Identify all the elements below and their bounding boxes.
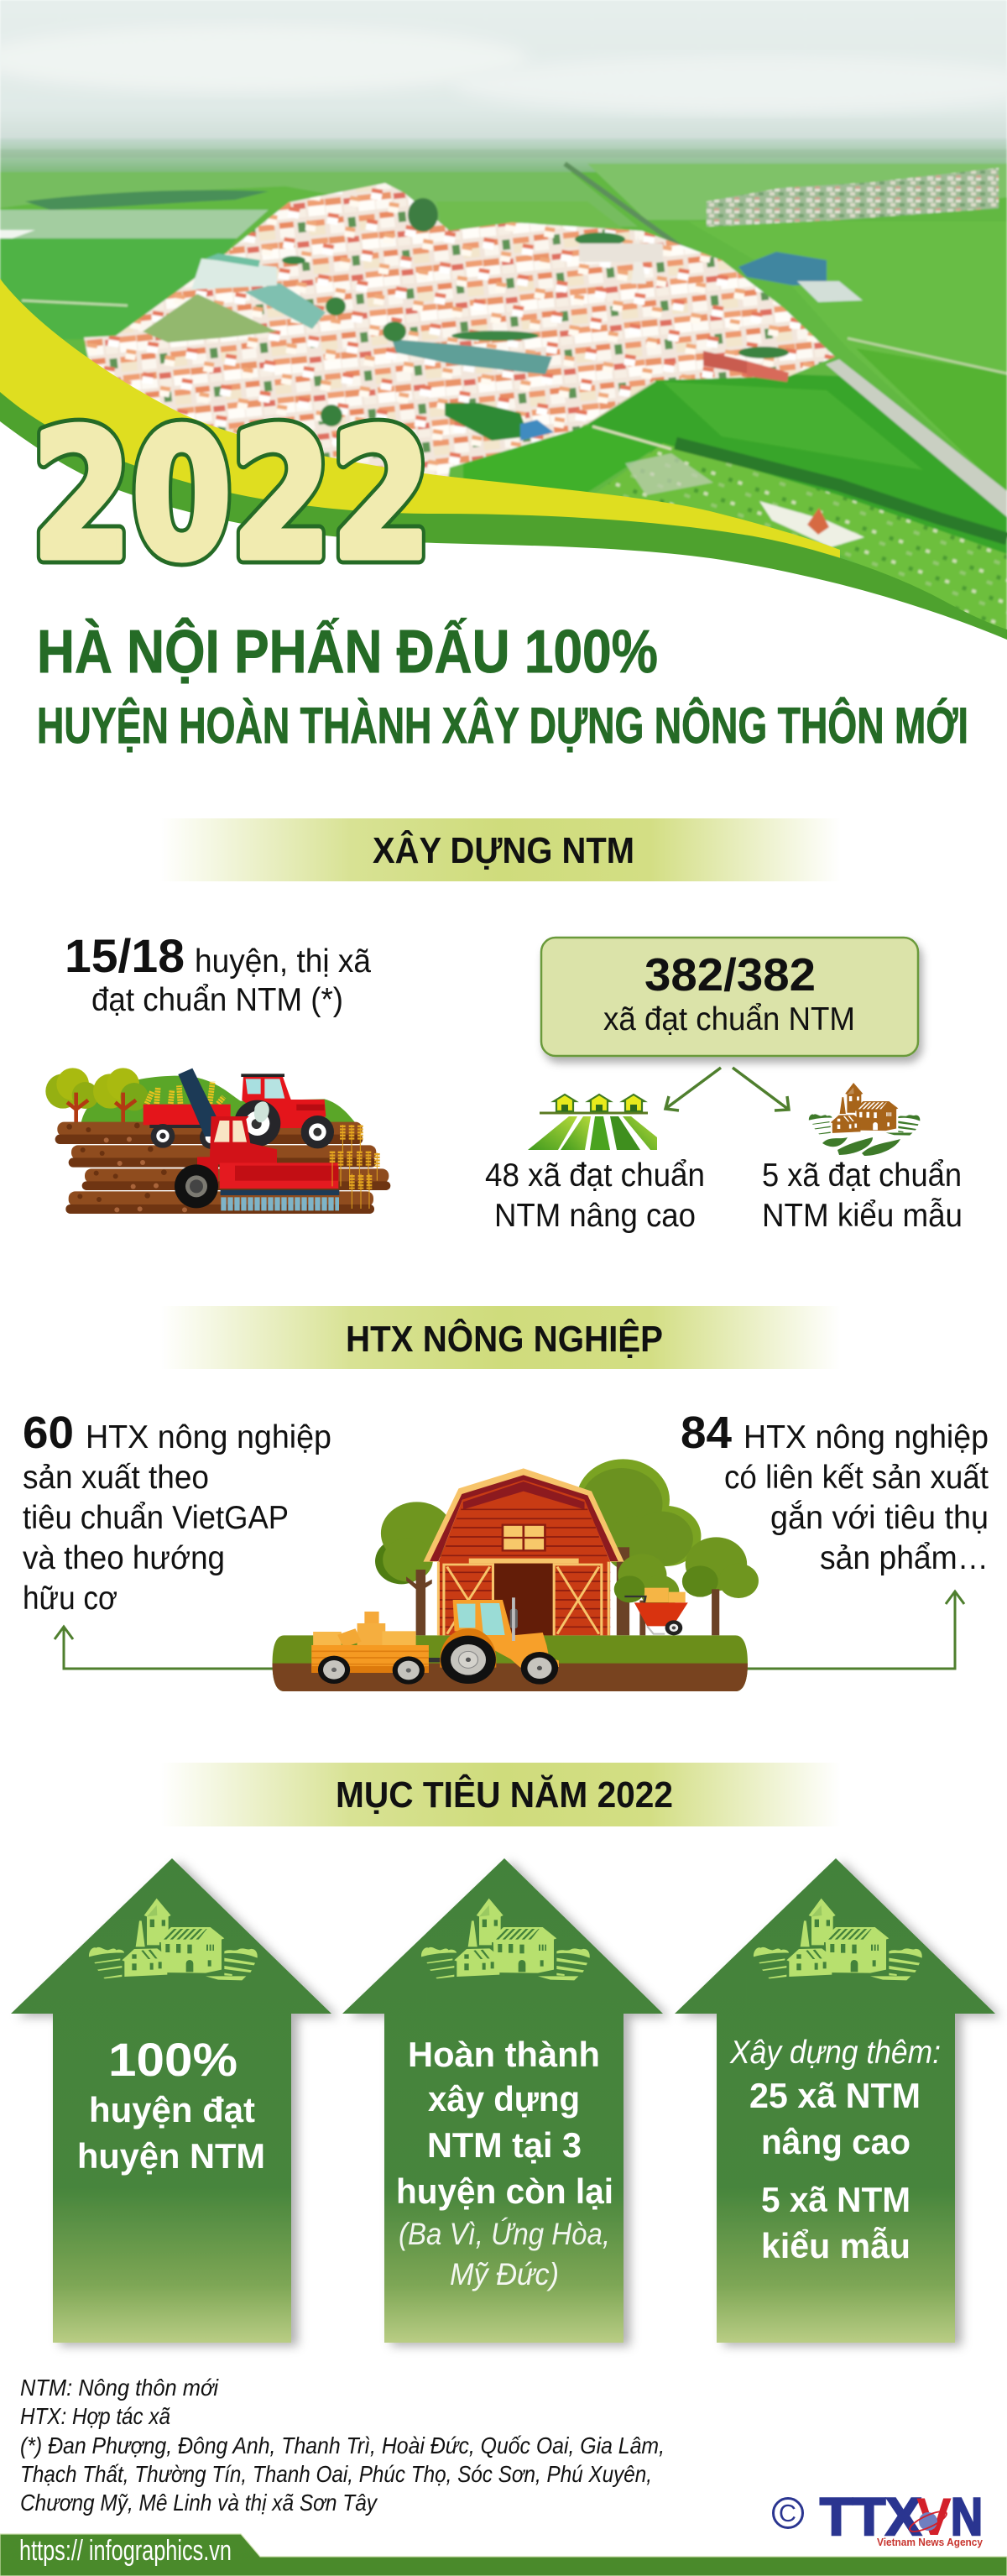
logo: TTXVN: V <box>916 2488 952 2547</box>
text: 48 advanced communes: 48 xã đạt chuẩn <box>485 1157 705 1194</box>
wheelbarrow <box>624 1588 688 1635</box>
ground <box>273 1635 748 1691</box>
goal text <box>77 2033 265 2176</box>
section heading: XÂY DỰNG NTM: XÂY DỰNG NTM <box>373 829 634 871</box>
goal text: kiểu mẫu <box>761 2225 910 2265</box>
goal text <box>729 2035 941 2265</box>
tree clusters <box>408 198 438 232</box>
panel: 382/382 communes: 382/382 <box>644 948 816 1001</box>
footnotes: HTX: Hợp tác xã <box>20 2403 170 2429</box>
goal text <box>396 2035 613 2291</box>
goal text: huyện NTM <box>77 2136 265 2176</box>
icon: church <box>89 1899 258 1980</box>
arrow: left connector <box>55 1627 277 1669</box>
text: 15/18 districts: 15/18 <box>65 929 185 982</box>
title: HÀ NỘI PHẤN ĐẤU 100% <box>37 618 658 686</box>
section heading: HTX NÔNG NGHIỆP <box>160 1306 841 1369</box>
text: 84 cooperatives: sản phẩm… <box>820 1540 989 1576</box>
text: 84 cooperatives <box>681 1408 989 1576</box>
arrow: right connector <box>747 1591 964 1669</box>
arrow shape <box>675 1858 995 2343</box>
panel: goal arrow 3 <box>675 1858 995 2343</box>
distant right village <box>707 168 999 227</box>
swoosh: yellow band <box>0 279 840 671</box>
right field <box>688 222 1007 495</box>
icon: tractor and harvester on farmland <box>45 1068 390 1214</box>
section heading: XÂY DỰNG NTM <box>160 818 841 881</box>
arrow shape <box>342 1858 663 2343</box>
text: 60 cooperatives: tiêu chuẩn VietGAP <box>23 1500 289 1536</box>
wheat behind trailer <box>147 1081 224 1104</box>
logo: TTXVN: Vietnam News Agency <box>877 2536 984 2548</box>
text: 48 advanced communes: NTM nâng cao <box>494 1198 696 1234</box>
text: 60 cooperatives: HTX nông nghiệp <box>86 1419 331 1455</box>
icon: brown village church <box>809 1083 920 1156</box>
section heading: HTX NÔNG NGHIỆP: HTX NÔNG NGHIỆP <box>346 1317 663 1360</box>
distant road <box>565 164 681 248</box>
barn <box>423 1468 624 1635</box>
section heading: MỤC TIÊU NĂM 2022 <box>160 1763 841 1826</box>
big year 2022: 2022 <box>32 393 431 598</box>
trailer <box>311 1645 441 1685</box>
swoosh: green band <box>0 392 1007 671</box>
footnotes: Thạch Thất, Thường Tín, Thanh Oai, Phúc Thọ, Sóc Sơn, Phú Xuyên, <box>20 2461 652 2487</box>
text: 48 advanced communes <box>485 1157 705 1234</box>
icon: church <box>754 1899 922 1980</box>
goal text: huyện còn lại <box>396 2171 613 2211</box>
title <box>37 618 968 754</box>
logo: TTXVN: N <box>951 2488 983 2547</box>
goal text: xây dựng <box>428 2079 580 2119</box>
text: 5 model communes <box>762 1157 963 1234</box>
goal text: 100% <box>108 2033 237 2086</box>
harvester <box>197 1116 277 1189</box>
text: 15/18 districts: đạt chuẩn NTM (*) <box>91 982 343 1018</box>
arrow to model communes <box>733 1068 789 1110</box>
left tree <box>375 1502 453 1635</box>
goal text: NTM tại 3 <box>427 2125 582 2165</box>
green patch by pond <box>143 294 277 342</box>
big year 2022: 2022 <box>32 393 431 598</box>
long houses <box>703 351 747 374</box>
text: 84 cooperatives: HTX nông nghiệp <box>744 1419 989 1455</box>
footer bar <box>0 2534 1007 2576</box>
ponds <box>245 283 326 329</box>
goal text: nâng cao <box>761 2122 910 2161</box>
village <box>84 183 835 504</box>
text: 60 cooperatives: và theo hướng <box>23 1540 225 1576</box>
text: 84 cooperatives: 84 <box>681 1408 732 1458</box>
icon: church <box>421 1899 590 1980</box>
goal text: Hoàn thành <box>408 2035 600 2074</box>
text: 60 cooperatives: sản xuất theo <box>23 1460 209 1496</box>
text: 5 model communes: NTM kiểu mẫu <box>762 1198 963 1234</box>
tractor <box>440 1597 559 1685</box>
footnotes: NTM: Nông thôn mới <box>20 2375 219 2401</box>
illustration: barn, trees and orange tractor <box>273 1459 759 1691</box>
text: 15/18 districts: huyện, thị xã <box>195 943 371 980</box>
main road <box>826 359 1007 517</box>
panel: goal arrow 1 <box>11 1858 331 2343</box>
panel: goal arrow 2 <box>342 1858 663 2343</box>
hero photo: aerial village and rice fields <box>0 0 1007 651</box>
logo: TTXVN: TTX <box>820 2488 921 2547</box>
far fields <box>0 172 638 227</box>
text: 60 cooperatives <box>23 1408 331 1617</box>
goal text: huyện đạt <box>89 2090 255 2129</box>
arrow shape <box>11 1858 331 2343</box>
far right tree <box>682 1537 759 1635</box>
chute <box>178 1069 217 1136</box>
goal text: Xây dựng thêm: <box>729 2035 941 2071</box>
goal text: 25 xã NTM <box>749 2076 921 2115</box>
text: 84 cooperatives: có liên kết sản xuất <box>724 1460 989 1496</box>
text: 5 model communes: 5 xã đạt chuẩn <box>762 1157 962 1194</box>
panel: 382/382 communes <box>541 938 918 1056</box>
small tree <box>614 1554 679 1635</box>
text: 60 cooperatives: hữu cơ <box>23 1581 117 1617</box>
arrow to advanced communes <box>665 1068 721 1110</box>
text: 84 cooperatives: gắn với tiêu thụ <box>770 1500 989 1536</box>
footnotes <box>20 2375 665 2516</box>
goal text: Mỹ Đức) <box>450 2257 559 2291</box>
text: 60 cooperatives: 60 <box>23 1408 74 1458</box>
section heading: MỤC TIÊU NĂM 2022: MỤC TIÊU NĂM 2022 <box>336 1774 673 1816</box>
goal text: (Ba Vì, Ứng Hòa, <box>399 2217 610 2251</box>
factory <box>738 252 827 285</box>
wheat right <box>332 1125 377 1209</box>
footnotes: Chương Mỹ, Mê Linh và thị xã Sơn Tây <box>20 2490 378 2516</box>
pond side buildings <box>191 259 277 290</box>
icon: houses and field stripes <box>528 1095 657 1150</box>
footer bar: https:// infographics.vn <box>19 2535 232 2567</box>
text: 15/18 districts <box>65 929 371 1018</box>
logo: TTXVN: C <box>779 2500 796 2527</box>
goal text: 5 xã NTM <box>761 2180 910 2219</box>
soil rows <box>55 1122 390 1214</box>
footnotes: (*) Đan Phượng, Đông Anh, Thanh Trì, Hoài Đức, Quốc Oai, Gia Lâm, <box>20 2432 665 2458</box>
center upper field <box>436 201 639 243</box>
trailer <box>143 1105 231 1125</box>
church spire <box>631 235 646 284</box>
swoosh: white cover <box>0 421 1007 671</box>
right big tree <box>577 1459 701 1635</box>
logo: TTXVN <box>774 2488 984 2548</box>
tractor <box>242 1076 326 1128</box>
panel: 382/382 communes: xã đạt chuẩn NTM <box>603 1001 855 1037</box>
hay <box>313 1612 416 1648</box>
foreground fields <box>587 369 1007 604</box>
